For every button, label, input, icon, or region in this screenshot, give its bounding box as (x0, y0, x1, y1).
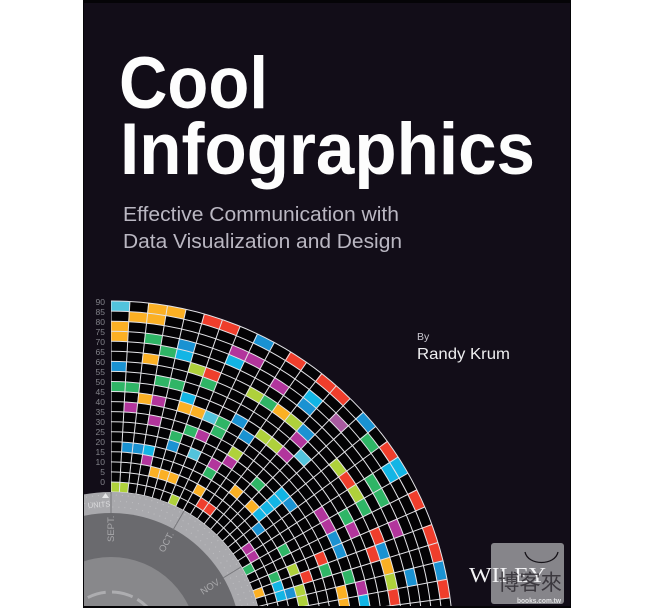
grey month dial (84, 492, 258, 606)
subtitle (123, 203, 402, 253)
y axis labels: 70 (96, 337, 105, 347)
title (119, 43, 535, 190)
author: By (417, 331, 430, 343)
dial labels: NOV. (199, 576, 223, 598)
watermark text: 博客來 (498, 571, 562, 595)
subtitle: Effective Communication with (123, 203, 399, 226)
subtitle: Data Visualization and Design (123, 230, 402, 253)
book cover background (83, 0, 571, 608)
y axis labels: 55 (96, 367, 105, 377)
y axis labels: 5 (100, 467, 105, 477)
heatmap coloured cells (0, 167, 587, 609)
y axis labels: 45 (96, 387, 105, 397)
author (417, 331, 510, 363)
y axis labels: 85 (96, 307, 105, 317)
y axis labels: 30 (96, 417, 105, 427)
books.com.tw watermark panel (491, 543, 564, 604)
y axis labels: 50 (96, 377, 105, 387)
y axis labels: 15 (96, 447, 105, 457)
heatmap grid lines (0, 301, 453, 609)
y axis labels (96, 297, 105, 487)
y axis labels: 0 (100, 477, 105, 487)
y axis labels: 90 (96, 297, 105, 307)
title: Infographics (120, 109, 535, 190)
y axis labels: 25 (96, 427, 105, 437)
y axis labels: 20 (96, 437, 105, 447)
y axis labels: 10 (96, 457, 105, 467)
title: Cool (119, 43, 268, 124)
y axis labels: 60 (96, 357, 105, 367)
y axis labels: 75 (96, 327, 105, 337)
watermark text: books.com.tw (517, 596, 561, 605)
y axis labels: 35 (96, 407, 105, 417)
y axis labels: 80 (96, 317, 105, 327)
radial heatmap chart (111, 300, 452, 606)
y axis labels: 65 (96, 347, 105, 357)
dial labels: OCT. (157, 530, 177, 554)
Wiley logo: WILEY (469, 563, 546, 587)
dial labels: UNITS (88, 499, 111, 510)
y axis labels: 40 (96, 397, 105, 407)
author: Randy Krum (417, 346, 510, 363)
dial labels (88, 493, 223, 598)
dial labels: SEPT. (106, 516, 117, 542)
